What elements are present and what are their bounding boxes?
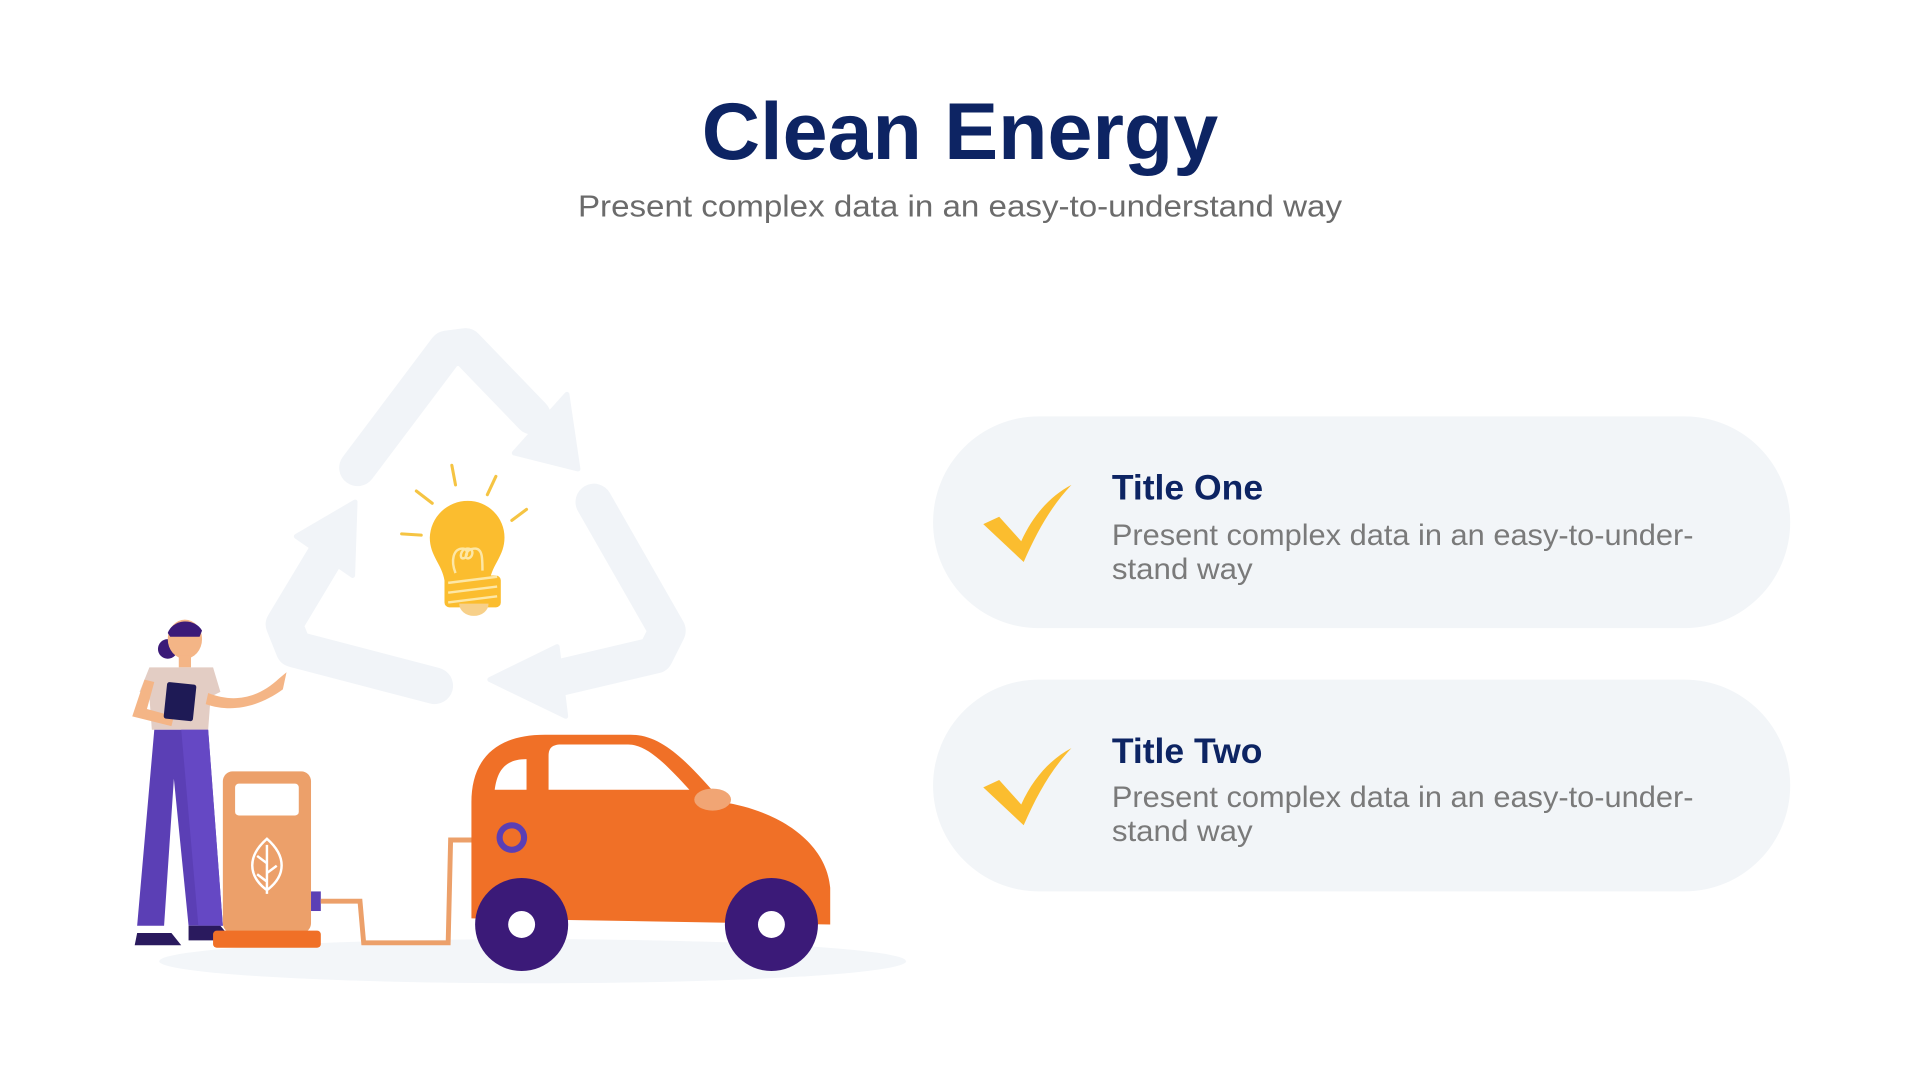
car (471, 735, 830, 971)
panel: title two: stand way (1112, 815, 1253, 848)
text: Present complex data in an easy-to-under- (1112, 519, 1693, 552)
panel: title one (933, 416, 1790, 628)
recycle triangle (284, 347, 667, 716)
charger (213, 771, 508, 948)
illustration (132, 347, 906, 983)
panel: title one: stand way (1112, 553, 1253, 586)
text: Present complex data in an easy-to-under- (1112, 781, 1693, 814)
heading: Title Two (1112, 731, 1262, 771)
person (132, 620, 287, 945)
subtitle: Present complex data in an easy-to-understand way (578, 190, 1343, 224)
icon: check (983, 485, 1071, 562)
heading: Title One (1112, 468, 1263, 508)
icon: check (983, 748, 1071, 825)
panel: title two (933, 680, 1790, 891)
ground shadow (159, 939, 906, 983)
title: Clean Energy (702, 87, 1218, 177)
icon: lightbulb (402, 465, 527, 616)
